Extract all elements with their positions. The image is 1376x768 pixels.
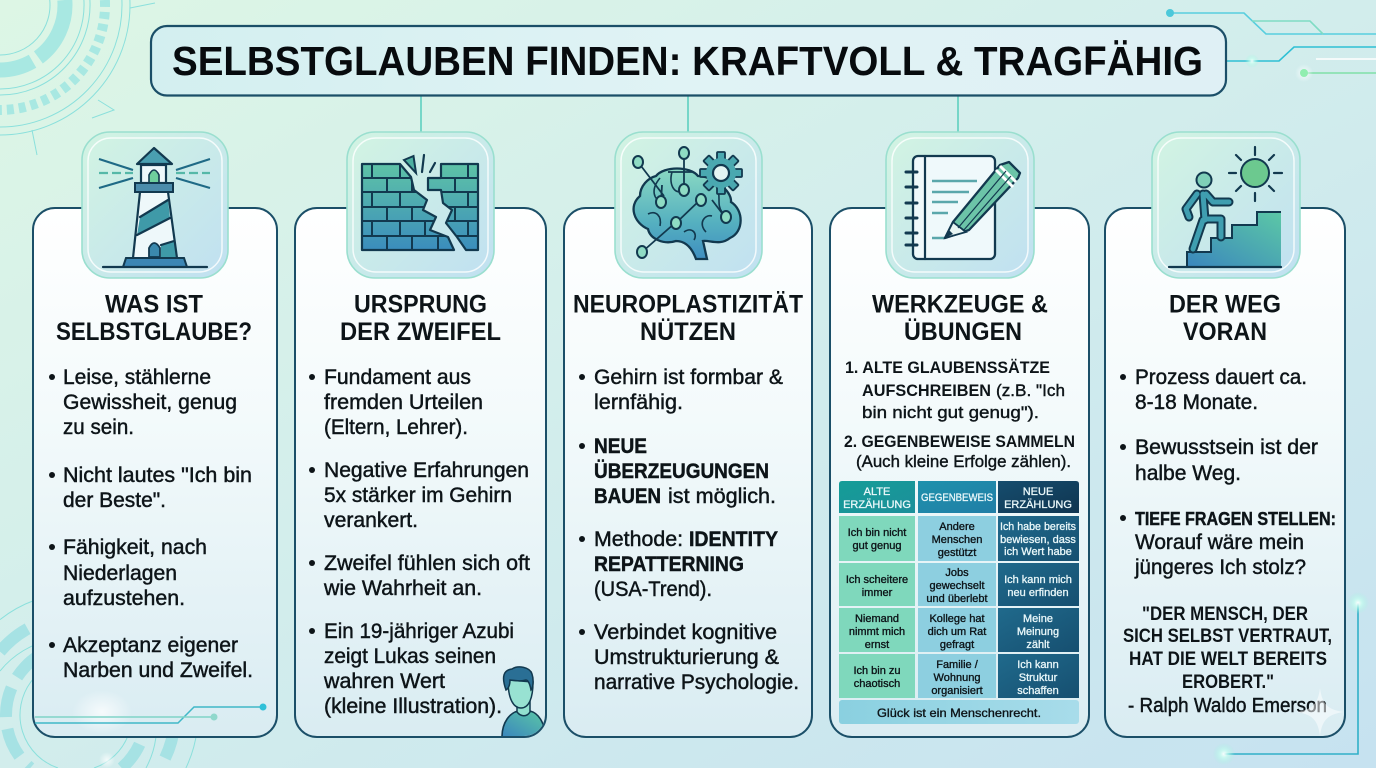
heading: ÜBUNGEN	[904, 317, 1022, 346]
table row 3: Kollege hat	[929, 613, 985, 625]
table row 3: Meine	[1023, 613, 1053, 625]
bullet list: Zweifel fühlen sich oft	[324, 552, 530, 575]
bullet list: Prozess dauert ca.	[1135, 366, 1307, 389]
table row 4: Struktur	[1019, 672, 1058, 684]
heading: DER WEG	[1169, 290, 1281, 318]
bullet list: Akzeptanz eigener	[63, 634, 238, 657]
numbered steps: (Auch kleine Erfolge zählen).	[856, 452, 1071, 471]
decoration: sparkle	[1296, 688, 1344, 736]
bullet list: Ein 19-jähriger Azubi	[324, 620, 514, 643]
bullet list: 8-18 Monate.	[1135, 391, 1258, 414]
table row 1	[839, 516, 1079, 561]
bullet list: Methode:	[594, 528, 683, 551]
bullet list: ÜBERZEUGUNGEN	[594, 460, 769, 483]
table row 4	[839, 654, 1079, 698]
table row 4: Ich bin zu	[853, 665, 901, 677]
bullet list: NEUE	[594, 435, 647, 458]
table: alte erzaehlung, gegenbeweis, neue erzaehlung	[839, 481, 1079, 724]
decoration: top-right circuits	[1166, 9, 1376, 82]
decoration: top-left circuit dial	[0, 0, 155, 155]
numbered steps: AUFSCHREIBEN	[862, 381, 991, 400]
bullet list	[49, 366, 253, 682]
table footer: Glück ist ein Menschenrecht.	[877, 706, 1041, 720]
card circuit decoration	[35, 690, 266, 734]
heading: SELBSTGLAUBE?	[56, 318, 252, 346]
panel: der weg voran	[1105, 208, 1345, 737]
bullet list: Fähigkeit, nach	[63, 536, 207, 559]
bullet list: narrative Psychologie.	[594, 671, 799, 694]
table row 3: nimmt mich	[849, 626, 905, 638]
heading: VORAN	[1183, 318, 1267, 346]
table row 2: Ich kann mich	[1004, 574, 1072, 586]
table row 3	[839, 608, 1079, 652]
bullet list: jüngeres Ich stolz?	[1134, 556, 1306, 579]
icon: person climbing stairs to sun	[1152, 132, 1300, 278]
numbered steps: bin nicht gut genug").	[862, 403, 1039, 422]
bullet list: IDENTITY	[689, 528, 778, 551]
table row 4: Ich kann	[1017, 659, 1059, 671]
bullet list: Verbindet kognitive	[594, 621, 777, 644]
bullet list: ist möglich.	[668, 485, 776, 508]
table row 1: Ich habe bereits	[1000, 521, 1076, 533]
bullet list: halbe Weg.	[1135, 462, 1241, 485]
quote: - Ralph Waldo Emerson	[1128, 695, 1327, 717]
bullet list: Gehirn ist formbar &	[594, 366, 783, 389]
bullet list: Narben und Zweifel.	[63, 659, 253, 682]
table row 4: organisiert	[931, 685, 983, 697]
table row 1: Menschen	[932, 534, 982, 546]
bullet list: 5x stärker im Gehirn	[324, 484, 512, 507]
table row 2: gewechselt	[929, 580, 985, 592]
quote: SICH SELBST VERTRAUT,	[1123, 626, 1332, 647]
table row 3: ernst	[865, 639, 889, 651]
table row 1: ich Wert habe	[1004, 546, 1072, 558]
bullet list: BAUEN	[594, 485, 661, 508]
bullet list: REPATTERNING	[594, 553, 744, 576]
table row 1: Ich bin nicht	[848, 527, 906, 539]
panel: neuroplastizitaet	[564, 208, 812, 737]
bullet list: TIEFE FRAGEN STELLEN:	[1135, 509, 1336, 529]
table row 4: chaotisch	[854, 678, 900, 690]
table row 3: Meinung	[1017, 626, 1059, 638]
bullet list: der Beste".	[63, 489, 166, 512]
title: SELBSTGLAUBEN FINDEN: KRAFTVOLL & TRAGFÄHIG	[172, 38, 1203, 84]
heading: URSPRUNG	[354, 290, 487, 318]
bullet list: zeigt Lukas seinen	[324, 645, 496, 668]
heading: DER ZWEIFEL	[340, 318, 501, 346]
bullet list: Fundament aus	[324, 366, 471, 389]
panel: werkzeuge und uebungen	[830, 208, 1089, 737]
bullet list: Bewusstsein ist der	[1135, 436, 1318, 459]
bullet list: wie Wahrheit an.	[323, 577, 482, 600]
heading: WAS IST	[105, 290, 203, 318]
bullet list: aufzustehen.	[63, 587, 185, 610]
heading	[340, 290, 501, 346]
bullet list	[309, 366, 530, 718]
bullet list: Negative Erfahrungen	[324, 459, 529, 482]
icon: brain with network and gear	[615, 132, 762, 278]
connector lines	[421, 96, 958, 132]
heading: NEUROPLASTIZITÄT	[573, 290, 803, 318]
heading	[872, 290, 1048, 346]
table row 2: neu erfinden	[1007, 587, 1069, 599]
table row 4: Familie /	[936, 659, 979, 671]
table header: ERZÄHLUNG	[843, 499, 911, 511]
table footer	[839, 700, 1079, 724]
heading	[573, 290, 803, 346]
heading	[56, 290, 252, 346]
bullet list	[1120, 366, 1336, 579]
table row 4: Wohnung	[934, 672, 980, 684]
heading	[1169, 290, 1281, 346]
bullet list: wahren Wert	[323, 670, 445, 693]
table row 1: Andere	[939, 521, 975, 533]
title	[151, 26, 1226, 96]
quote: EROBERT."	[1182, 672, 1274, 693]
quote	[1123, 604, 1332, 717]
panel: ursprung der zweifel	[295, 208, 546, 737]
table row 2: Jobs	[945, 567, 969, 579]
bullet list: (Eltern, Lehrer).	[324, 416, 468, 439]
table row 2	[839, 563, 1079, 606]
panel: was ist selbstglaube	[33, 208, 277, 737]
table row 2: immer	[862, 587, 893, 599]
bullet list: Gewissheit, genug	[63, 391, 237, 414]
quote: "DER MENSCH, DER	[1142, 604, 1308, 625]
quote: HAT DIE WELT BEREITS	[1129, 649, 1327, 670]
bullet list: (kleine Illustration).	[324, 695, 502, 718]
icon: small person illustration	[502, 667, 545, 737]
table row 2: und überlebt	[926, 593, 988, 605]
table row 1: bewiesen, dass	[1000, 534, 1076, 546]
numbered steps: 1. ALTE GLAUBENSSÄTZE	[845, 358, 1050, 377]
bullet list	[579, 366, 799, 694]
icon: cracked brick wall	[347, 132, 494, 278]
bullet list: lernfähig.	[594, 391, 683, 414]
table header: ALTE	[864, 486, 890, 498]
decoration: bottom-right circuit	[1213, 592, 1369, 765]
bullet list: zu sein.	[63, 416, 134, 439]
table row 3: Niemand	[855, 613, 899, 625]
numbered steps: 2. GEGENBEWEISE SAMMELN	[844, 432, 1075, 451]
bullet list: Worauf wäre mein	[1135, 531, 1304, 554]
heading: NÜTZEN	[640, 317, 736, 346]
table row 3: dich um Rat	[928, 626, 986, 638]
heading: WERKZEUGE &	[872, 290, 1048, 318]
table header: ERZÄHLUNG	[1004, 499, 1072, 511]
table row 3: zählt	[1026, 639, 1050, 651]
decoration: bottom-left circuit dial	[0, 593, 198, 768]
icon: lighthouse	[82, 132, 228, 278]
bullet list: Umstrukturierung &	[594, 646, 779, 669]
bullet list: Nicht lautes "Ich bin	[63, 464, 252, 487]
table row 4: schaffen	[1017, 685, 1059, 697]
table row 1: gut genug	[853, 540, 901, 552]
bullet list: verankert.	[324, 509, 418, 532]
table row 3: gefragt	[940, 639, 974, 651]
table header: NEUE	[1023, 486, 1053, 498]
bullet list: (USA-Trend).	[594, 578, 712, 601]
table row 2: Ich scheitere	[846, 574, 908, 586]
numbered steps	[844, 358, 1075, 471]
bullet list: Niederlagen	[63, 562, 177, 585]
icon: notebook and pencil	[886, 132, 1034, 278]
table row 1: gestützt	[938, 547, 976, 559]
table header: GEGENBEWEIS	[921, 492, 993, 504]
bullet list: fremden Urteilen	[324, 391, 483, 414]
table header	[839, 481, 1079, 513]
bullet list: Leise, stählerne	[63, 366, 211, 389]
numbered steps: (z.B. "Ich	[996, 381, 1065, 400]
